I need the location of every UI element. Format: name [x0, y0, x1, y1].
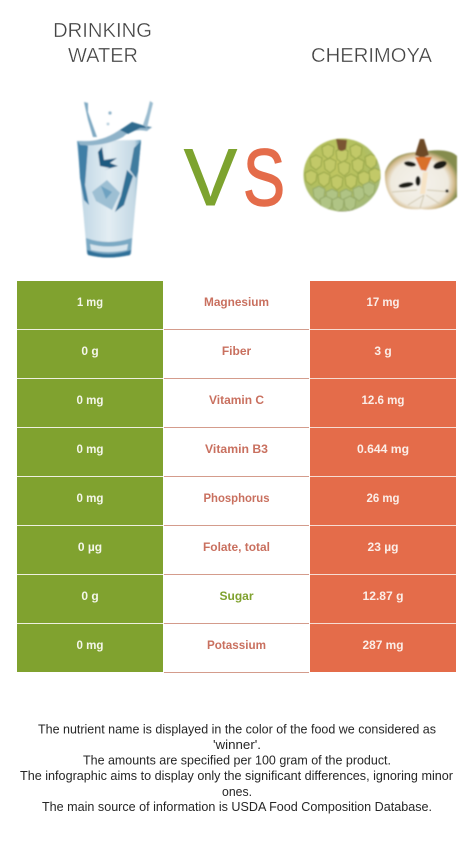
row: folate: 23 µg	[368, 540, 398, 554]
row: phosphorus	[76, 491, 400, 505]
row: fiber: 0 g	[81, 344, 99, 358]
icon: whole cherimoya	[304, 138, 381, 212]
row: fiber	[81, 344, 392, 358]
row: vitamin c: Vitamin C	[209, 393, 264, 407]
title: drinking water	[53, 20, 152, 67]
row: sugar: Sugar	[219, 589, 254, 603]
row: folate	[78, 540, 398, 554]
row: magnesium	[77, 295, 400, 309]
row: potassium: 287 mg	[362, 638, 404, 652]
footer note: The amounts are specified per 100 gram of the product.	[83, 752, 391, 768]
row: vitamin c	[76, 393, 404, 407]
row: magnesium: Magnesium	[204, 295, 269, 309]
row: sugar: 12.87 g	[362, 589, 404, 603]
row: potassium: Potassium	[207, 638, 266, 652]
footer note: The infographic aims to display only the significant differences, ignoring minor	[20, 768, 454, 783]
title: drinking water: WATER	[68, 45, 138, 67]
versus label: S	[243, 133, 285, 223]
footer note: The main source of information is USDA Food Composition Database.	[42, 799, 432, 814]
row: magnesium: 1 mg	[77, 295, 103, 309]
row: phosphorus: Phosphorus	[204, 491, 270, 505]
versus label: V	[184, 133, 237, 223]
footer note: 'winner'.	[213, 737, 261, 752]
row: fiber: 3 g	[374, 344, 392, 358]
row: vitamin c: 12.6 mg	[362, 393, 404, 407]
row: potassium: 0 mg	[76, 638, 104, 652]
footer note	[20, 722, 454, 814]
icon: halved cherimoya	[385, 139, 457, 210]
icon: glass of water with splash	[77, 101, 153, 258]
row: vitamin b3: 0.644 mg	[357, 442, 409, 456]
row: vitamin b3: 0 mg	[76, 442, 104, 456]
row: sugar	[81, 589, 404, 603]
column: drinking water values	[17, 281, 163, 672]
row: potassium	[76, 638, 404, 652]
row: vitamin b3	[76, 442, 409, 456]
title: cherimoya: CHERIMOYA	[311, 45, 433, 67]
row: fiber: Fiber	[222, 344, 251, 358]
versus label	[184, 133, 285, 223]
row: folate: 0 µg	[78, 540, 102, 554]
row: magnesium: 17 mg	[366, 295, 400, 309]
comparison table	[17, 281, 456, 672]
row: sugar: 0 g	[81, 589, 99, 603]
row: folate: Folate, total	[203, 540, 270, 554]
column: cherimoya values	[310, 281, 456, 672]
row: phosphorus: 26 mg	[366, 491, 400, 505]
title: drinking water: DRINKING	[53, 20, 152, 42]
row: phosphorus: 0 mg	[76, 491, 104, 505]
row: vitamin c: 0 mg	[76, 393, 104, 407]
footer note: The nutrient name is displayed in the color of the food we considered as	[38, 722, 436, 736]
row: vitamin b3: Vitamin B3	[205, 442, 268, 456]
footer note: ones.	[222, 784, 252, 799]
